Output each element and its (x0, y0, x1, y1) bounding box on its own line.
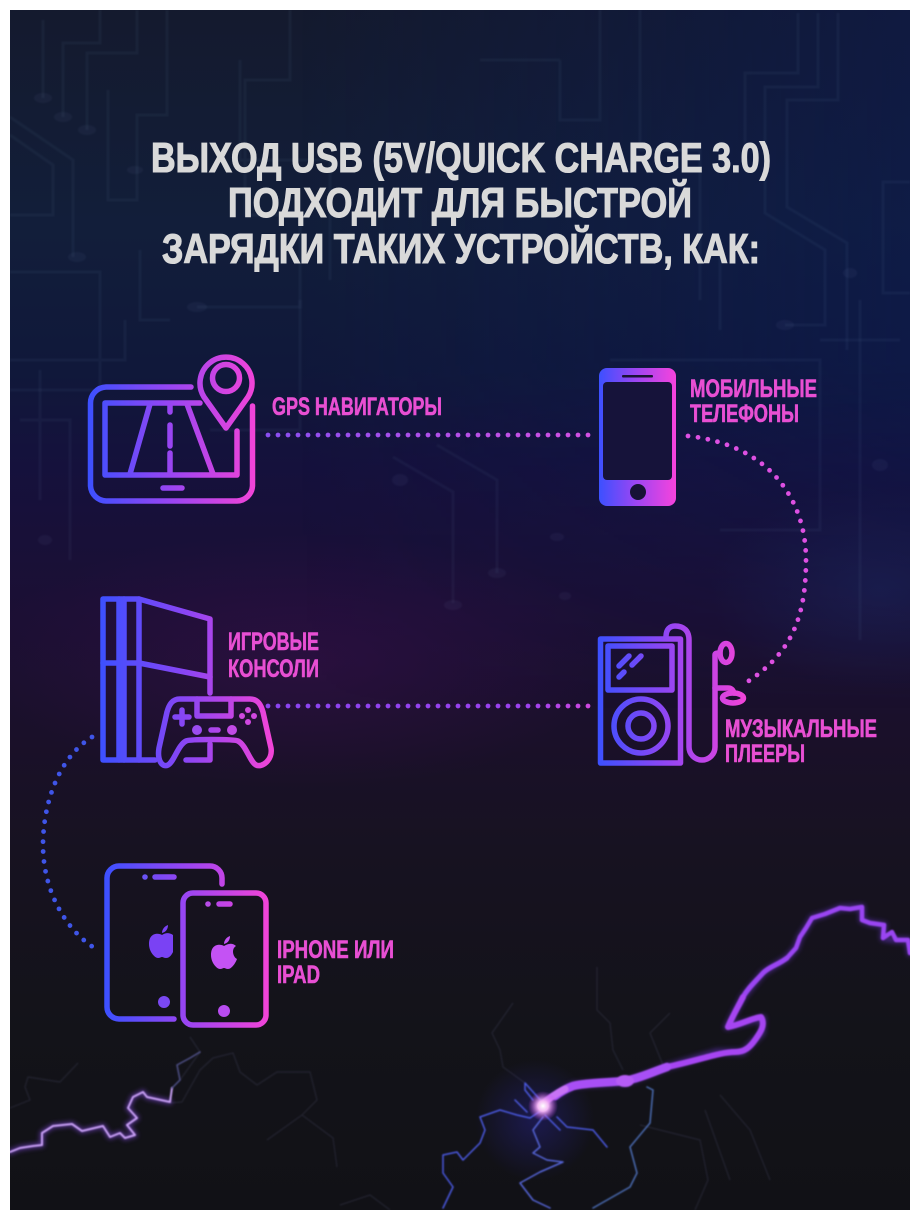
icon: game console with controller (103, 599, 271, 766)
label: iPhone or iPad: IPHONE ИЛИ (277, 936, 394, 964)
lightning: spark core (528, 1091, 558, 1121)
title: ЗАРЯДКИ ТАКИХ УСТРОЙСТВ, КАК: (162, 224, 760, 272)
label: mobile phones: МОБИЛЬНЫЕ (690, 375, 817, 403)
label: music players (725, 715, 877, 768)
lightning: right bolt (543, 907, 910, 1104)
label: game consoles (228, 628, 319, 683)
label: GPS navigators: GPS НАВИГАТОРЫ (272, 393, 442, 421)
label: iPhone or iPad: IPAD (277, 961, 320, 989)
label: game consoles: КОНСОЛИ (228, 655, 319, 683)
icon: GPS navigator (90, 357, 252, 501)
lightning: blue branches at the spark (443, 1083, 653, 1208)
lightning: left bolt (10, 1052, 200, 1152)
label: iPhone or iPad (277, 936, 394, 989)
title (151, 134, 771, 272)
title: ПОДХОДИТ ДЛЯ БЫСТРОЙ (228, 178, 692, 226)
dotted connector: music player to console (268, 704, 592, 708)
dotted connector: console to tablet (43, 737, 96, 949)
label: music players: ПЛЕЕРЫ (725, 740, 805, 768)
icon: music player with earphones (600, 626, 744, 763)
label: mobile phones (690, 375, 817, 428)
dotted connector: phone to music player (688, 436, 806, 684)
label: mobile phones: ТЕЛЕФОНЫ (690, 400, 799, 428)
title: ВЫХОД USB (5V/QUICK CHARGE 3.0) (151, 134, 771, 181)
icon: iPad and iPhone (107, 866, 266, 1025)
icon: mobile phone (599, 368, 676, 506)
label: game consoles: ИГРОВЫЕ (228, 628, 319, 656)
dotted connector: GPS to phone (268, 433, 592, 437)
